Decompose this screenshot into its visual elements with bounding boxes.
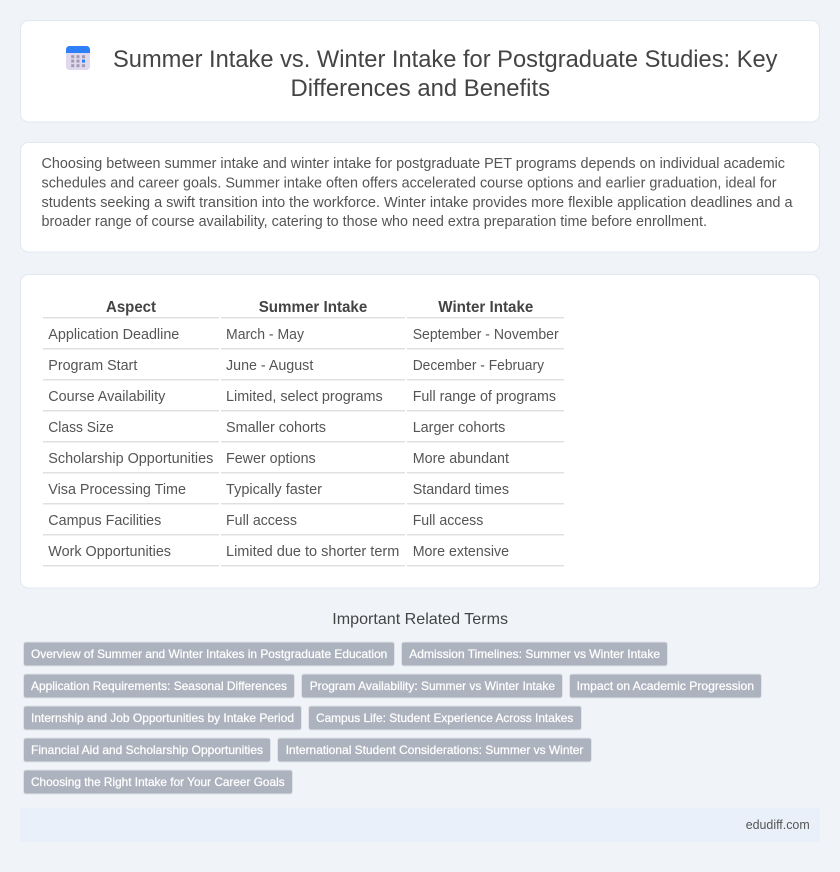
table row: application deadline: September - November xyxy=(413,327,559,343)
tag: overview xyxy=(24,642,394,666)
table row: class size: Class Size xyxy=(48,420,114,436)
table row: campus facilities: Full access xyxy=(413,513,483,529)
panel: comparison table xyxy=(20,274,820,588)
tag: financial aid xyxy=(24,738,270,762)
table header row xyxy=(43,299,564,318)
text block: introduction paragraph: students seeking a swift transition into the workforce. Winter intake provides more flexible application deadlines and a xyxy=(42,195,792,211)
tag: internship and job opportunities xyxy=(24,706,302,730)
table header row: Summer Intake xyxy=(259,299,368,316)
table row: course availability xyxy=(43,389,564,412)
tag: program availability xyxy=(302,674,562,698)
tag: admission timelines xyxy=(402,642,668,666)
table row: course availability: Limited, select programs xyxy=(226,389,383,405)
table row: work opportunities: Limited due to shorter term xyxy=(226,544,399,560)
tag: overview: Overview of Summer and Winter Intakes in Postgraduate Education xyxy=(31,647,387,661)
table row: application deadline: Application Deadline xyxy=(48,327,179,343)
table row: work opportunities xyxy=(43,544,564,566)
table header row: Winter Intake xyxy=(438,299,534,316)
table row: program start: Program Start xyxy=(48,358,137,374)
footer xyxy=(20,808,820,842)
table header row: Aspect xyxy=(106,299,156,316)
panel: related term tags xyxy=(24,642,762,794)
table row: application deadline xyxy=(43,327,564,350)
table row: application deadline: March - May xyxy=(226,327,305,343)
title: Differences and Benefits xyxy=(290,75,550,102)
text block: introduction paragraph: broader range of course availability, catering to those who need extra preparation time before enrollment. xyxy=(42,214,707,230)
table row: class size xyxy=(43,420,564,442)
icon: calendar xyxy=(66,46,90,70)
footer: edudiff.com xyxy=(746,818,810,832)
table row: course availability: Course Availability xyxy=(48,389,166,405)
table row: class size: Larger cohorts xyxy=(413,420,505,436)
tag: campus life xyxy=(308,706,582,730)
title xyxy=(113,46,778,102)
panel: introduction xyxy=(20,142,820,252)
tag: internship and job opportunities: Internship and Job Opportunities by Intake Period xyxy=(31,711,294,725)
tag: academic progression: Impact on Academic Progression xyxy=(577,679,754,693)
tag: campus life: Campus Life: Student Experience Across Intakes xyxy=(316,711,573,725)
heading: important related terms: Important Related Terms xyxy=(332,611,508,628)
table row: scholarship opportunities: More abundant xyxy=(413,451,509,467)
table row: class size: Smaller cohorts xyxy=(226,420,326,436)
tag: application requirements xyxy=(24,674,294,698)
tag: international students xyxy=(278,738,592,762)
table row: work opportunities: More extensive xyxy=(413,544,509,560)
table row: program start: June - August xyxy=(226,358,313,374)
tag: choosing the right intake: Choosing the Right Intake for Your Career Goals xyxy=(31,775,285,789)
text block: introduction paragraph: Choosing between summer intake and winter intake for postgraduate PET programs depends on individual academic xyxy=(42,156,785,172)
table row: scholarship opportunities: Fewer options xyxy=(226,451,316,467)
table row: visa processing time: Typically faster xyxy=(226,482,322,498)
tag: international students: International Student Considerations: Summer vs Winter xyxy=(286,743,583,757)
table row: visa processing time xyxy=(43,482,564,504)
table row: program start xyxy=(43,358,564,380)
table row: scholarship opportunities: Scholarship Opportunities xyxy=(48,451,213,467)
title: Summer Intake vs. Winter Intake for Postgraduate Studies: Key xyxy=(113,46,778,73)
text block: introduction paragraph: schedules and career goals. Summer intake often offers accelerated course options and earlier graduation, ideal for xyxy=(42,176,777,192)
table row: work opportunities: Work Opportunities xyxy=(48,544,171,560)
tag: academic progression xyxy=(570,674,762,698)
text block: introduction paragraph xyxy=(42,156,792,230)
tag: choosing the right intake xyxy=(24,770,292,794)
table row: visa processing time: Visa Processing Time xyxy=(48,482,186,498)
table row: campus facilities xyxy=(43,513,564,536)
table row: campus facilities: Campus Facilities xyxy=(48,513,161,529)
tag: admission timelines: Admission Timelines: Summer vs Winter Intake xyxy=(409,647,660,661)
table row: course availability: Full range of programs xyxy=(413,389,556,405)
table row: campus facilities: Full access xyxy=(226,513,297,529)
tag: financial aid: Financial Aid and Scholarship Opportunities xyxy=(31,743,263,757)
table row: visa processing time: Standard times xyxy=(413,482,509,498)
panel: header xyxy=(20,20,820,122)
tag: program availability: Program Availability: Summer vs Winter Intake xyxy=(310,679,555,693)
table row: scholarship opportunities xyxy=(43,451,564,474)
table row: program start: December - February xyxy=(413,358,545,374)
tag: application requirements: Application Requirements: Seasonal Differences xyxy=(31,679,287,693)
